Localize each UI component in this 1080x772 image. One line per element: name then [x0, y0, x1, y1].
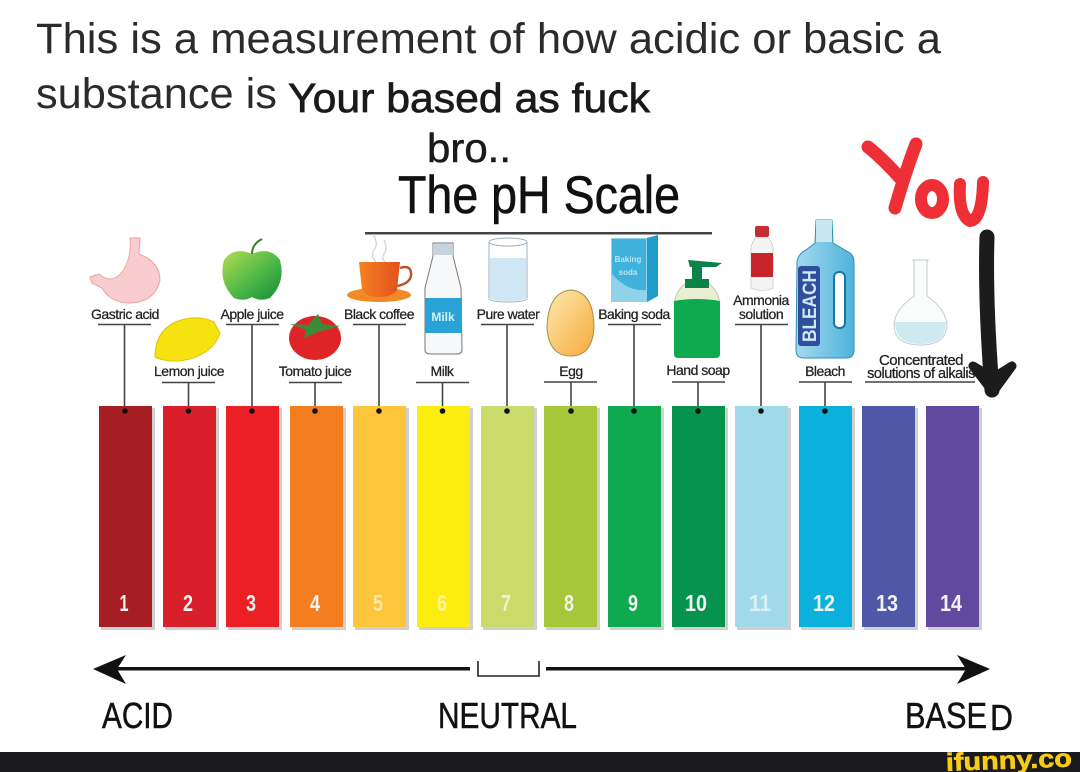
- icon: apple: [222, 239, 282, 300]
- title: The pH Scale: The pH Scale: [398, 166, 680, 225]
- icon: hand soap: [674, 260, 722, 358]
- pH numbers: 8: [564, 590, 574, 616]
- item labels and leader lines: Bleach: [805, 363, 845, 379]
- icon: glass of water: [489, 238, 527, 302]
- item labels and leader lines: Baking soda: [598, 306, 670, 322]
- pH numbers: 11: [749, 590, 771, 616]
- item labels and leader lines: Ammonia: [733, 292, 790, 308]
- icon: stomach: [90, 238, 160, 303]
- icon: baking soda box: soda: [619, 268, 638, 277]
- meme caption: Your based as fuck: [288, 75, 651, 121]
- item labels and leader lines: Black coffee: [344, 306, 415, 322]
- pH numbers: 12: [813, 590, 835, 616]
- icon: lemon: [155, 318, 220, 361]
- scale end labels: BASE: [905, 695, 987, 736]
- scale end labels: ACID: [102, 695, 173, 736]
- item labels and leader lines: [91, 292, 975, 411]
- pH numbers: 10: [685, 590, 707, 616]
- annotation: You: [868, 144, 983, 221]
- icon: flask: [894, 260, 947, 345]
- item labels and leader lines: Gastric acid: [91, 306, 159, 322]
- item labels and leader lines: Egg: [559, 363, 583, 379]
- pH numbers: 1: [120, 590, 129, 616]
- leader dots: [122, 408, 828, 414]
- icon: ammonia bottle: [751, 226, 773, 290]
- meme caption: This is a measurement of how acidic or basic a: [36, 15, 941, 63]
- pH colour bars: [99, 406, 982, 630]
- item labels and leader lines: Lemon juice: [154, 363, 225, 379]
- pH numbers: 14: [940, 590, 962, 616]
- pH numbers: 4: [310, 590, 320, 616]
- item labels and leader lines: Apple juice: [220, 306, 284, 322]
- item labels and leader lines: Hand soap: [666, 362, 730, 378]
- item labels and leader lines: Pure water: [477, 306, 540, 322]
- pH numbers: 5: [373, 590, 383, 616]
- item labels and leader lines: Tomato juice: [279, 363, 352, 379]
- meme caption: substance is: [36, 70, 277, 118]
- pH numbers: 7: [501, 590, 511, 616]
- meme caption: bro..: [427, 125, 511, 171]
- annotation: black arrow: [973, 237, 1012, 392]
- icon: baking soda box: [611, 235, 658, 302]
- pH numbers: 3: [246, 590, 256, 616]
- icon: tomato: [289, 314, 341, 360]
- acid to base double arrow with neutral bracket: [93, 655, 990, 684]
- icon: coffee cup: [347, 234, 411, 302]
- item labels and leader lines: solutions of alkalis: [867, 366, 975, 382]
- pH numbers: 13: [876, 590, 898, 616]
- icon: milk bottle: [425, 243, 462, 354]
- icon: milk bottle: Milk: [431, 310, 455, 324]
- pH numbers: [120, 590, 962, 616]
- icon: egg: [547, 290, 594, 356]
- icon: baking soda box: Baking: [615, 255, 641, 264]
- pH numbers: 9: [628, 590, 638, 616]
- footer bar: [0, 752, 1080, 772]
- icon: bleach bottle: BLEACH: [800, 270, 821, 342]
- item labels and leader lines: Milk: [431, 363, 455, 379]
- scale end labels: D: [990, 697, 1013, 738]
- scale end labels: [102, 695, 1013, 738]
- meme caption: [36, 15, 941, 171]
- scale end labels: NEUTRAL: [438, 695, 577, 736]
- pH numbers: 2: [183, 590, 193, 616]
- item labels and leader lines: Concentrated: [879, 352, 963, 369]
- pH numbers: 6: [437, 590, 447, 616]
- icon: bleach bottle: [796, 220, 854, 358]
- item labels and leader lines: solution: [739, 306, 783, 322]
